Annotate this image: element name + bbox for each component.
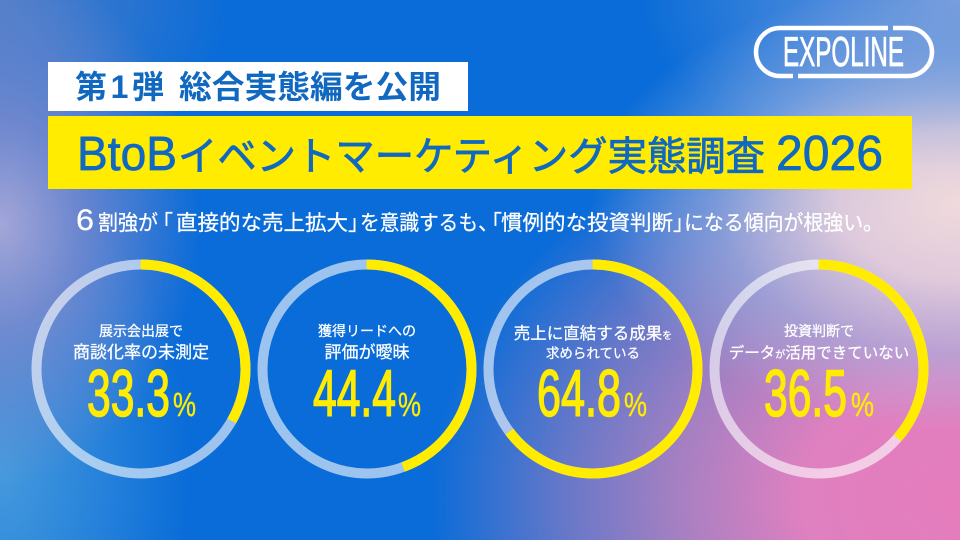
- stat ring: 33.3%: [36, 264, 246, 474]
- subtitle: [76, 204, 883, 237]
- subtitle: 「: [152, 212, 173, 235]
- stat ring: 36.5%: データが活用できていない: [729, 343, 909, 362]
- title banner: [48, 116, 912, 189]
- stat ring: 64.8%: [488, 264, 698, 474]
- stat ring: 44.4%: [262, 264, 472, 474]
- stat ring: 36.5%: 投資判断で: [784, 323, 854, 339]
- subtitle: 直接的な売上拡大: [176, 212, 348, 235]
- stat ring: 44.4%: 獲得リードへの: [318, 323, 416, 339]
- subtitle: 」: [348, 212, 369, 235]
- label: first release banner: 第1弾: [75, 69, 164, 105]
- stat ring: 33.3%: %: [173, 386, 196, 423]
- label: first release banner: 総合実態編を公開: [179, 69, 441, 105]
- stat ring: 33.3%: 展示会出展で: [99, 323, 183, 339]
- subtitle: 、: [478, 212, 499, 235]
- stat ring: 44.4%: 評価が曖昧: [324, 343, 410, 362]
- stat ring: 44.4%: 44.4: [313, 356, 396, 430]
- subtitle: になる傾向が根強い。: [684, 212, 883, 235]
- stat ring: 36.5%: 36.5: [764, 356, 847, 430]
- subtitle: 6: [76, 204, 94, 237]
- subtitle: 慣例的な投資判断: [501, 212, 673, 235]
- title banner: 2026: [776, 127, 883, 181]
- label: first release banner: [48, 62, 468, 111]
- stat ring: 64.8%: 64.8: [537, 356, 621, 430]
- subtitle: 「: [481, 212, 502, 235]
- stat ring: 36.5%: %: [851, 386, 874, 423]
- stat ring: 44.4%: %: [398, 386, 421, 423]
- subtitle: 割強が: [98, 212, 158, 235]
- stat ring: 33.3%: 商談化率の未測定: [73, 343, 209, 362]
- title banner: BtoB: [77, 128, 177, 181]
- subtitle: を意識するも: [360, 212, 478, 235]
- stat ring: 64.8%: %: [624, 386, 647, 423]
- stat ring: 64.8%: 売上に直結する成果を: [514, 324, 672, 343]
- stat ring: 64.8%: 求められている: [546, 346, 640, 361]
- title banner: イベントマーケティング実態調査: [178, 135, 765, 179]
- stat ring: 36.5%: [714, 264, 924, 474]
- subtitle: 」: [673, 212, 694, 235]
- stat ring: 33.3%: 33.3: [87, 356, 170, 430]
